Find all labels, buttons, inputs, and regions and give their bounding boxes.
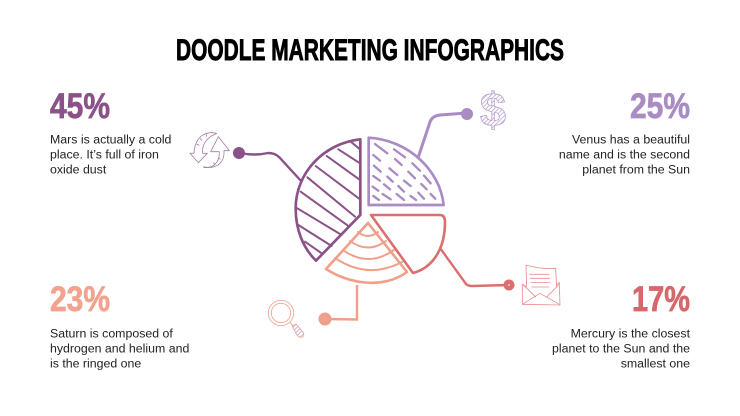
text block: Saturn 23%: hydrogen and helium and: [50, 342, 189, 356]
text block: Saturn 23%: Saturn is composed of: [50, 326, 173, 340]
text block: Mercury 17%: 17%: [632, 280, 690, 319]
icon: refresh arrows: [190, 133, 229, 168]
connector: Venus: [418, 108, 473, 158]
pie slice: Venus: [369, 138, 444, 205]
text block: Venus 25%: 25%: [630, 87, 690, 126]
icon: magnifying glass: [268, 300, 304, 337]
icon: dollar sign: $: [480, 83, 506, 136]
text block: Mars 45%: oxide dust: [50, 162, 107, 176]
text block: Saturn 23%: 23%: [50, 280, 110, 319]
text block: Mercury 17%: [552, 280, 691, 370]
text block: Mars 45%: 45%: [50, 87, 110, 126]
pie slice: Saturn: [326, 223, 407, 283]
text block: Venus 25%: Venus has a beautiful: [572, 132, 690, 146]
text block: Saturn 23%: is the ringed one: [50, 356, 141, 370]
title: DOODLE MARKETING INFOGRAPHICS: [176, 34, 564, 67]
pie slice: Mercury: [371, 215, 445, 273]
text block: Mercury 17%: smallest one: [621, 356, 690, 370]
text block: Mercury 17%: planet to the Sun and the: [552, 342, 690, 356]
connector: Saturn: [318, 285, 357, 326]
text block: Venus 25%: planet from the Sun: [582, 162, 690, 176]
connector: Mars: [233, 147, 302, 182]
text block: Venus 25%: name and is the second: [559, 148, 690, 162]
text block: Mars 45%: [50, 87, 172, 176]
text block: Mars 45%: Mars is actually a cold: [50, 132, 172, 146]
text block: Saturn 23%: [50, 280, 189, 370]
text block: Mercury 17%: Mercury is the closest: [571, 326, 691, 340]
text block: Venus 25%: [559, 87, 690, 176]
connector: Mercury: [440, 248, 514, 290]
pie slice: Mars: [296, 139, 360, 261]
icon: envelope with letter: [522, 265, 560, 305]
text block: Mars 45%: place. It’s full of iron: [50, 148, 159, 162]
